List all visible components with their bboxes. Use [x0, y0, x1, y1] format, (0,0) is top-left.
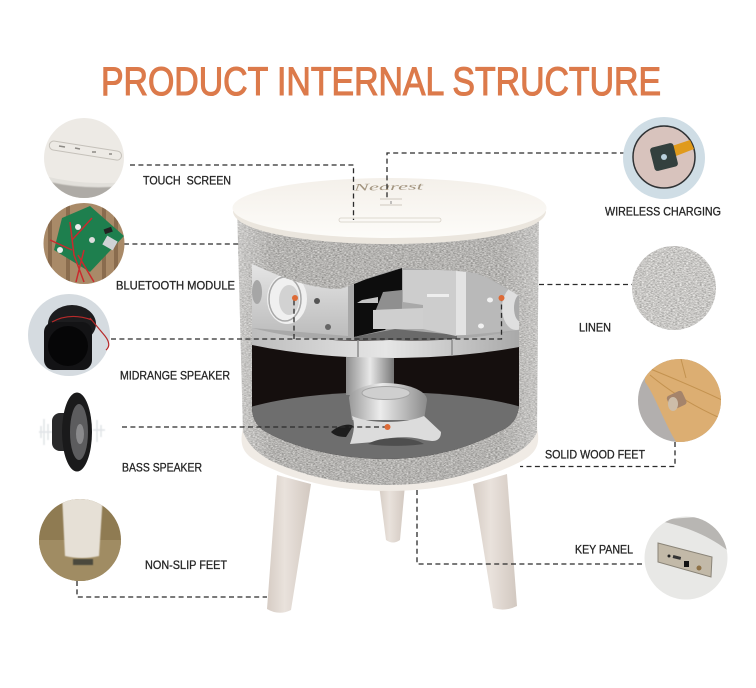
- callout dot: right midrange speaker: [498, 295, 504, 301]
- right speaker box: [403, 270, 530, 336]
- photo: bass speaker: [39, 392, 105, 472]
- label: non-slip feet: NON-SLIP FEET: [145, 558, 228, 572]
- label: bluetooth module: BLUETOOTH MODULE: [116, 278, 235, 292]
- leader lines: [77, 153, 675, 597]
- bottom cream lip: [242, 428, 538, 491]
- shelf seams: [358, 340, 452, 357]
- left speaker box: [252, 262, 348, 336]
- black gap in upper cavity: [354, 268, 402, 337]
- callout dot: left midrange speaker: [292, 295, 298, 301]
- label: linen: LINEN: [579, 320, 611, 334]
- speaker magnet: [52, 413, 74, 451]
- bass speaker frame: [350, 416, 441, 444]
- bass speaker base shadow: [331, 425, 353, 437]
- bass speaker magnet: [349, 383, 427, 420]
- linen body: [237, 205, 539, 485]
- photo: key panel: [644, 516, 728, 600]
- speaker frame: [62, 392, 92, 472]
- upper cavity background: [252, 268, 518, 340]
- cutaway interior: [252, 264, 519, 459]
- label: solid wood feet: SOLID WOOD FEET: [545, 448, 646, 462]
- title: PRODUCT INTERNAL STRUCTURE: [101, 60, 661, 104]
- photo: solid wood feet: [638, 359, 721, 442]
- right front leg: [473, 474, 517, 610]
- grey stairs in gap: [376, 290, 402, 310]
- sound wave left: [39, 419, 52, 445]
- shelf ring: [252, 328, 519, 358]
- photo: wireless charging: [623, 117, 705, 199]
- left midrange speaker cone: [252, 274, 331, 330]
- label: wireless charging: WIRELESS CHARGING: [605, 204, 721, 218]
- sound wave right: [93, 420, 105, 442]
- label: bass speaker: BASS SPEAKER: [122, 460, 202, 474]
- label: key panel: KEY PANEL: [575, 542, 633, 556]
- product: side table cutaway: [216, 178, 556, 613]
- speaker cone: [70, 404, 88, 460]
- speaker dust cap: [76, 424, 84, 444]
- touch panel outline: [339, 218, 441, 222]
- left front leg: [267, 475, 311, 613]
- dark lower cavity: [252, 340, 519, 465]
- bass speaker cone opening: [368, 438, 424, 446]
- central column: [346, 357, 394, 395]
- body side shading: [237, 205, 539, 485]
- tabletop edge: [233, 211, 546, 244]
- photo: linen: [632, 246, 716, 330]
- label: midrange speaker: MIDRANGE SPEAKER: [120, 368, 230, 382]
- label: touch screen: TOUCH SCREEN: [143, 174, 231, 188]
- callout dot: bass speaker: [384, 424, 390, 430]
- photo: midrange speaker: [28, 294, 110, 376]
- central small block: [354, 297, 457, 340]
- photo: bluetooth module: [44, 203, 124, 284]
- photo: touch screen: [44, 118, 124, 198]
- floor disc: [252, 393, 519, 459]
- back leg: [379, 485, 405, 542]
- bass speaker magnet top: [362, 386, 410, 400]
- brand wordmark: Nearest: [352, 181, 424, 194]
- tabletop surface: [232, 178, 546, 238]
- wireless charging mark: [380, 199, 402, 205]
- photo: non-slip feet: [39, 499, 121, 581]
